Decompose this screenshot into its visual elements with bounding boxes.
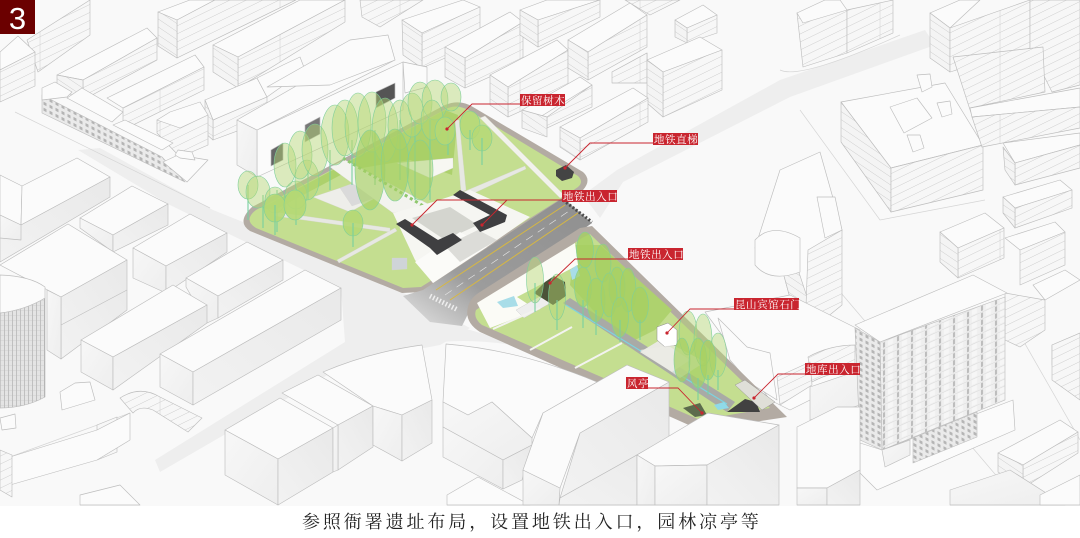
corner fragments west xyxy=(0,382,202,505)
tower east xyxy=(755,152,842,335)
caption strip xyxy=(0,506,1080,538)
callout: wind pavilion xyxy=(626,377,704,415)
icon: metro exit pavilion xyxy=(534,276,566,305)
callout: Kunshan hotel stone gate: 昆山宾馆石门 xyxy=(735,298,801,311)
callout: wind pavilion: 风亭 xyxy=(627,377,649,390)
park north: central plaza xyxy=(393,190,530,283)
small tree row xyxy=(343,158,425,207)
callout: preserved trees: 保留树木 xyxy=(521,94,565,107)
icon: garage entrance roof xyxy=(727,380,775,412)
road network xyxy=(78,30,935,472)
curved building xyxy=(705,295,860,420)
trees: north row xyxy=(238,80,492,247)
park south: outer border xyxy=(467,226,787,430)
historic long building xyxy=(42,82,208,182)
foreground white blocks: west xyxy=(0,158,341,405)
cylindrical building xyxy=(0,275,45,408)
lawn shaded strip xyxy=(262,110,458,210)
icon: metro lift kiosk xyxy=(556,165,574,181)
callout: garage entrance: 地库出入口 xyxy=(806,363,861,376)
hotel building xyxy=(855,275,1015,490)
badge: number 3: 3 xyxy=(9,1,26,36)
park south: promenade xyxy=(563,298,735,412)
park north: outer border xyxy=(243,102,587,293)
background buildings: north centre xyxy=(360,0,722,160)
callout: metro entrance north xyxy=(410,190,618,227)
caption: 参照衙署遗址布局，设置地铁出入口，园林凉亭等 xyxy=(302,512,762,532)
park south: lawn xyxy=(475,234,770,420)
callout: Kunshan hotel stone gate xyxy=(665,298,801,335)
icon: dark roof west wing xyxy=(396,219,462,255)
callout: metro entrance south: 地铁出入口 xyxy=(629,248,684,261)
park south: white plaza and water xyxy=(477,243,622,368)
badge: number 3 xyxy=(0,0,35,36)
callout: metro lift: 地铁直梯 xyxy=(654,133,698,146)
icon: dark roof east wing xyxy=(453,190,507,232)
callout: preserved trees xyxy=(445,94,565,131)
park north: lawn xyxy=(250,107,581,288)
callout: metro lift xyxy=(563,133,698,170)
icon: wind pavilion xyxy=(683,403,707,417)
white building with pictures xyxy=(237,35,427,177)
park north: paths xyxy=(275,116,565,270)
foreground white blocks: south xyxy=(225,344,860,505)
callout: metro entrance south xyxy=(548,248,684,285)
road xyxy=(403,198,592,326)
callout: garage entrance xyxy=(752,363,861,400)
background buildings: apartment blocks north-west xyxy=(0,0,345,140)
callout: metro entrance north: 地铁出入口 xyxy=(563,190,618,203)
trees: south park xyxy=(526,232,726,400)
background buildings: north-east xyxy=(797,0,1080,505)
